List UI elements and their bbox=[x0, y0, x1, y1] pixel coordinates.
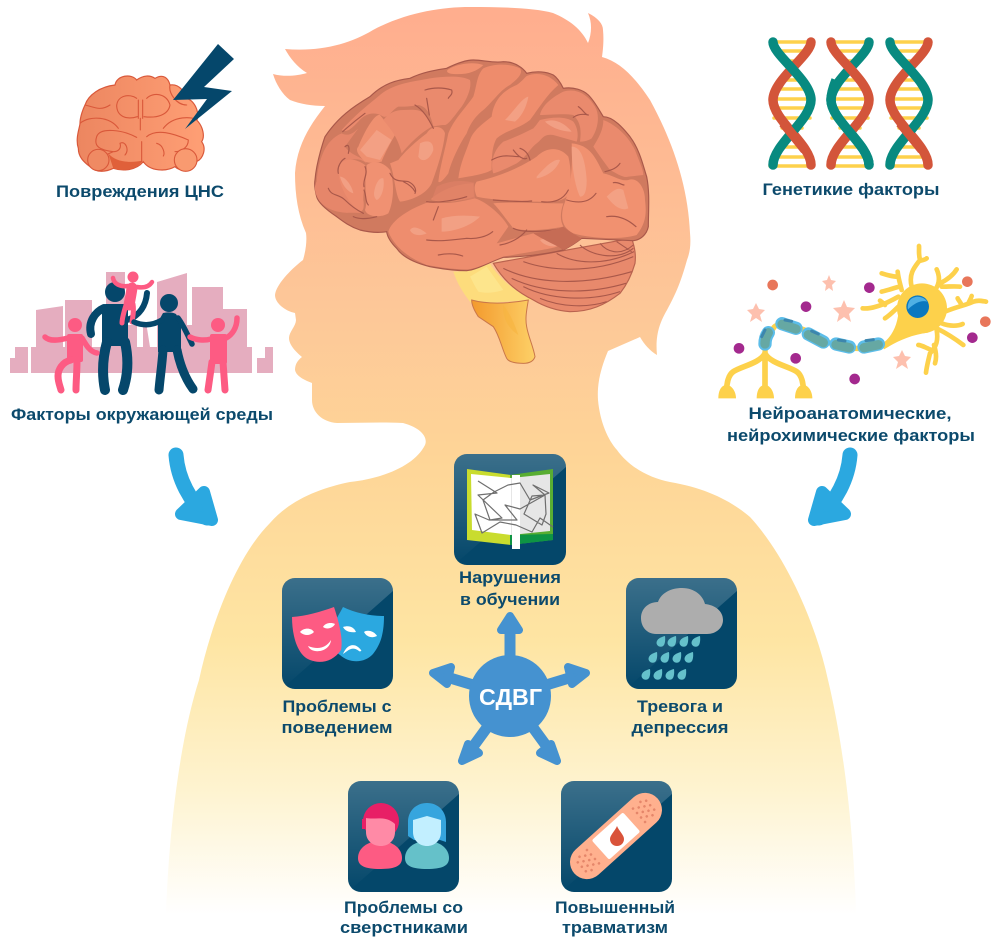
dendrites bbox=[863, 246, 986, 373]
label: CNS damage: Повреждения ЦНС bbox=[56, 182, 224, 201]
adult left bbox=[90, 282, 147, 390]
shaded base bbox=[108, 153, 143, 170]
nucleus bbox=[906, 295, 929, 318]
label: behaviour bbox=[282, 697, 392, 737]
label: learning: Нарушения bbox=[459, 568, 561, 587]
icon: CNS brain with lightning bbox=[77, 44, 234, 171]
label: behaviour: поведением bbox=[282, 718, 392, 737]
card: anxiety and depression bbox=[626, 578, 737, 689]
lightning bolt bbox=[173, 44, 234, 129]
label: neuroanatomical factors: Нейроанатомические, bbox=[748, 404, 952, 423]
label: neuroanatomical factors: нейрохимические факторы bbox=[727, 426, 975, 445]
card: peer problems bbox=[348, 781, 459, 892]
hub label: СДВГ bbox=[479, 684, 542, 710]
card: learning disorders bbox=[454, 454, 566, 565]
label: injuries bbox=[555, 898, 675, 937]
card: behaviour problems bbox=[282, 578, 393, 689]
molecules bbox=[734, 282, 978, 384]
label: learning bbox=[459, 568, 561, 609]
label: peers bbox=[340, 898, 468, 937]
terminals bbox=[718, 385, 812, 398]
gyri bbox=[315, 63, 646, 269]
myelin sheaths bbox=[762, 320, 878, 348]
label: peers: Проблемы со bbox=[344, 898, 463, 917]
icon: rain cloud bbox=[641, 588, 723, 680]
label: environment factors: Факторы окружающей среды bbox=[11, 405, 273, 424]
helix 1 bbox=[770, 42, 812, 166]
helix 2 bbox=[828, 42, 870, 166]
label: peers: сверстниками bbox=[340, 918, 468, 937]
city skyline bbox=[10, 272, 273, 373]
adult right bbox=[134, 294, 193, 390]
icon: open book bbox=[467, 469, 553, 549]
child right bbox=[190, 318, 237, 390]
cell body bbox=[882, 283, 947, 349]
label: injuries: травматизм bbox=[562, 918, 668, 937]
label: injuries: Повышенный bbox=[555, 898, 675, 917]
stars bbox=[747, 275, 911, 369]
icon: two peers bbox=[358, 803, 449, 869]
highlights bbox=[340, 97, 628, 246]
child left bbox=[45, 318, 97, 390]
folds bbox=[80, 85, 197, 162]
icon: bandage bbox=[563, 786, 669, 886]
cerebrum base bbox=[315, 60, 649, 271]
shaded inner folds bbox=[432, 181, 475, 201]
label: learning: в обучении bbox=[460, 590, 560, 609]
brain stem bbox=[453, 263, 535, 363]
axon and terminals bbox=[727, 246, 986, 390]
label: genetic factors: Генетикие факторы bbox=[762, 180, 940, 199]
brain bbox=[315, 60, 649, 363]
icon: theatre masks bbox=[292, 607, 384, 662]
arrow: right blue bbox=[814, 455, 850, 520]
label: neuroanatomical factors bbox=[727, 404, 975, 445]
card: injuries bbox=[561, 781, 672, 892]
cerebrum bbox=[315, 60, 649, 271]
sulci bbox=[328, 88, 636, 256]
toddler bbox=[113, 272, 152, 323]
helix 3 bbox=[887, 42, 929, 166]
icon: DNA helices bbox=[770, 42, 929, 166]
label: behaviour: Проблемы с bbox=[282, 697, 392, 716]
illustration: neuron bbox=[718, 246, 991, 398]
illustration: family and city bbox=[10, 272, 273, 390]
arrow: left blue bbox=[176, 455, 212, 520]
silhouette of a child bbox=[166, 7, 856, 913]
ADHD hub with arrows bbox=[433, 616, 586, 761]
label: anxiety: депрессия bbox=[632, 718, 728, 737]
cerebellum bbox=[493, 238, 635, 312]
label: anxiety: Тревога и bbox=[637, 697, 723, 716]
label: anxiety bbox=[632, 697, 728, 737]
